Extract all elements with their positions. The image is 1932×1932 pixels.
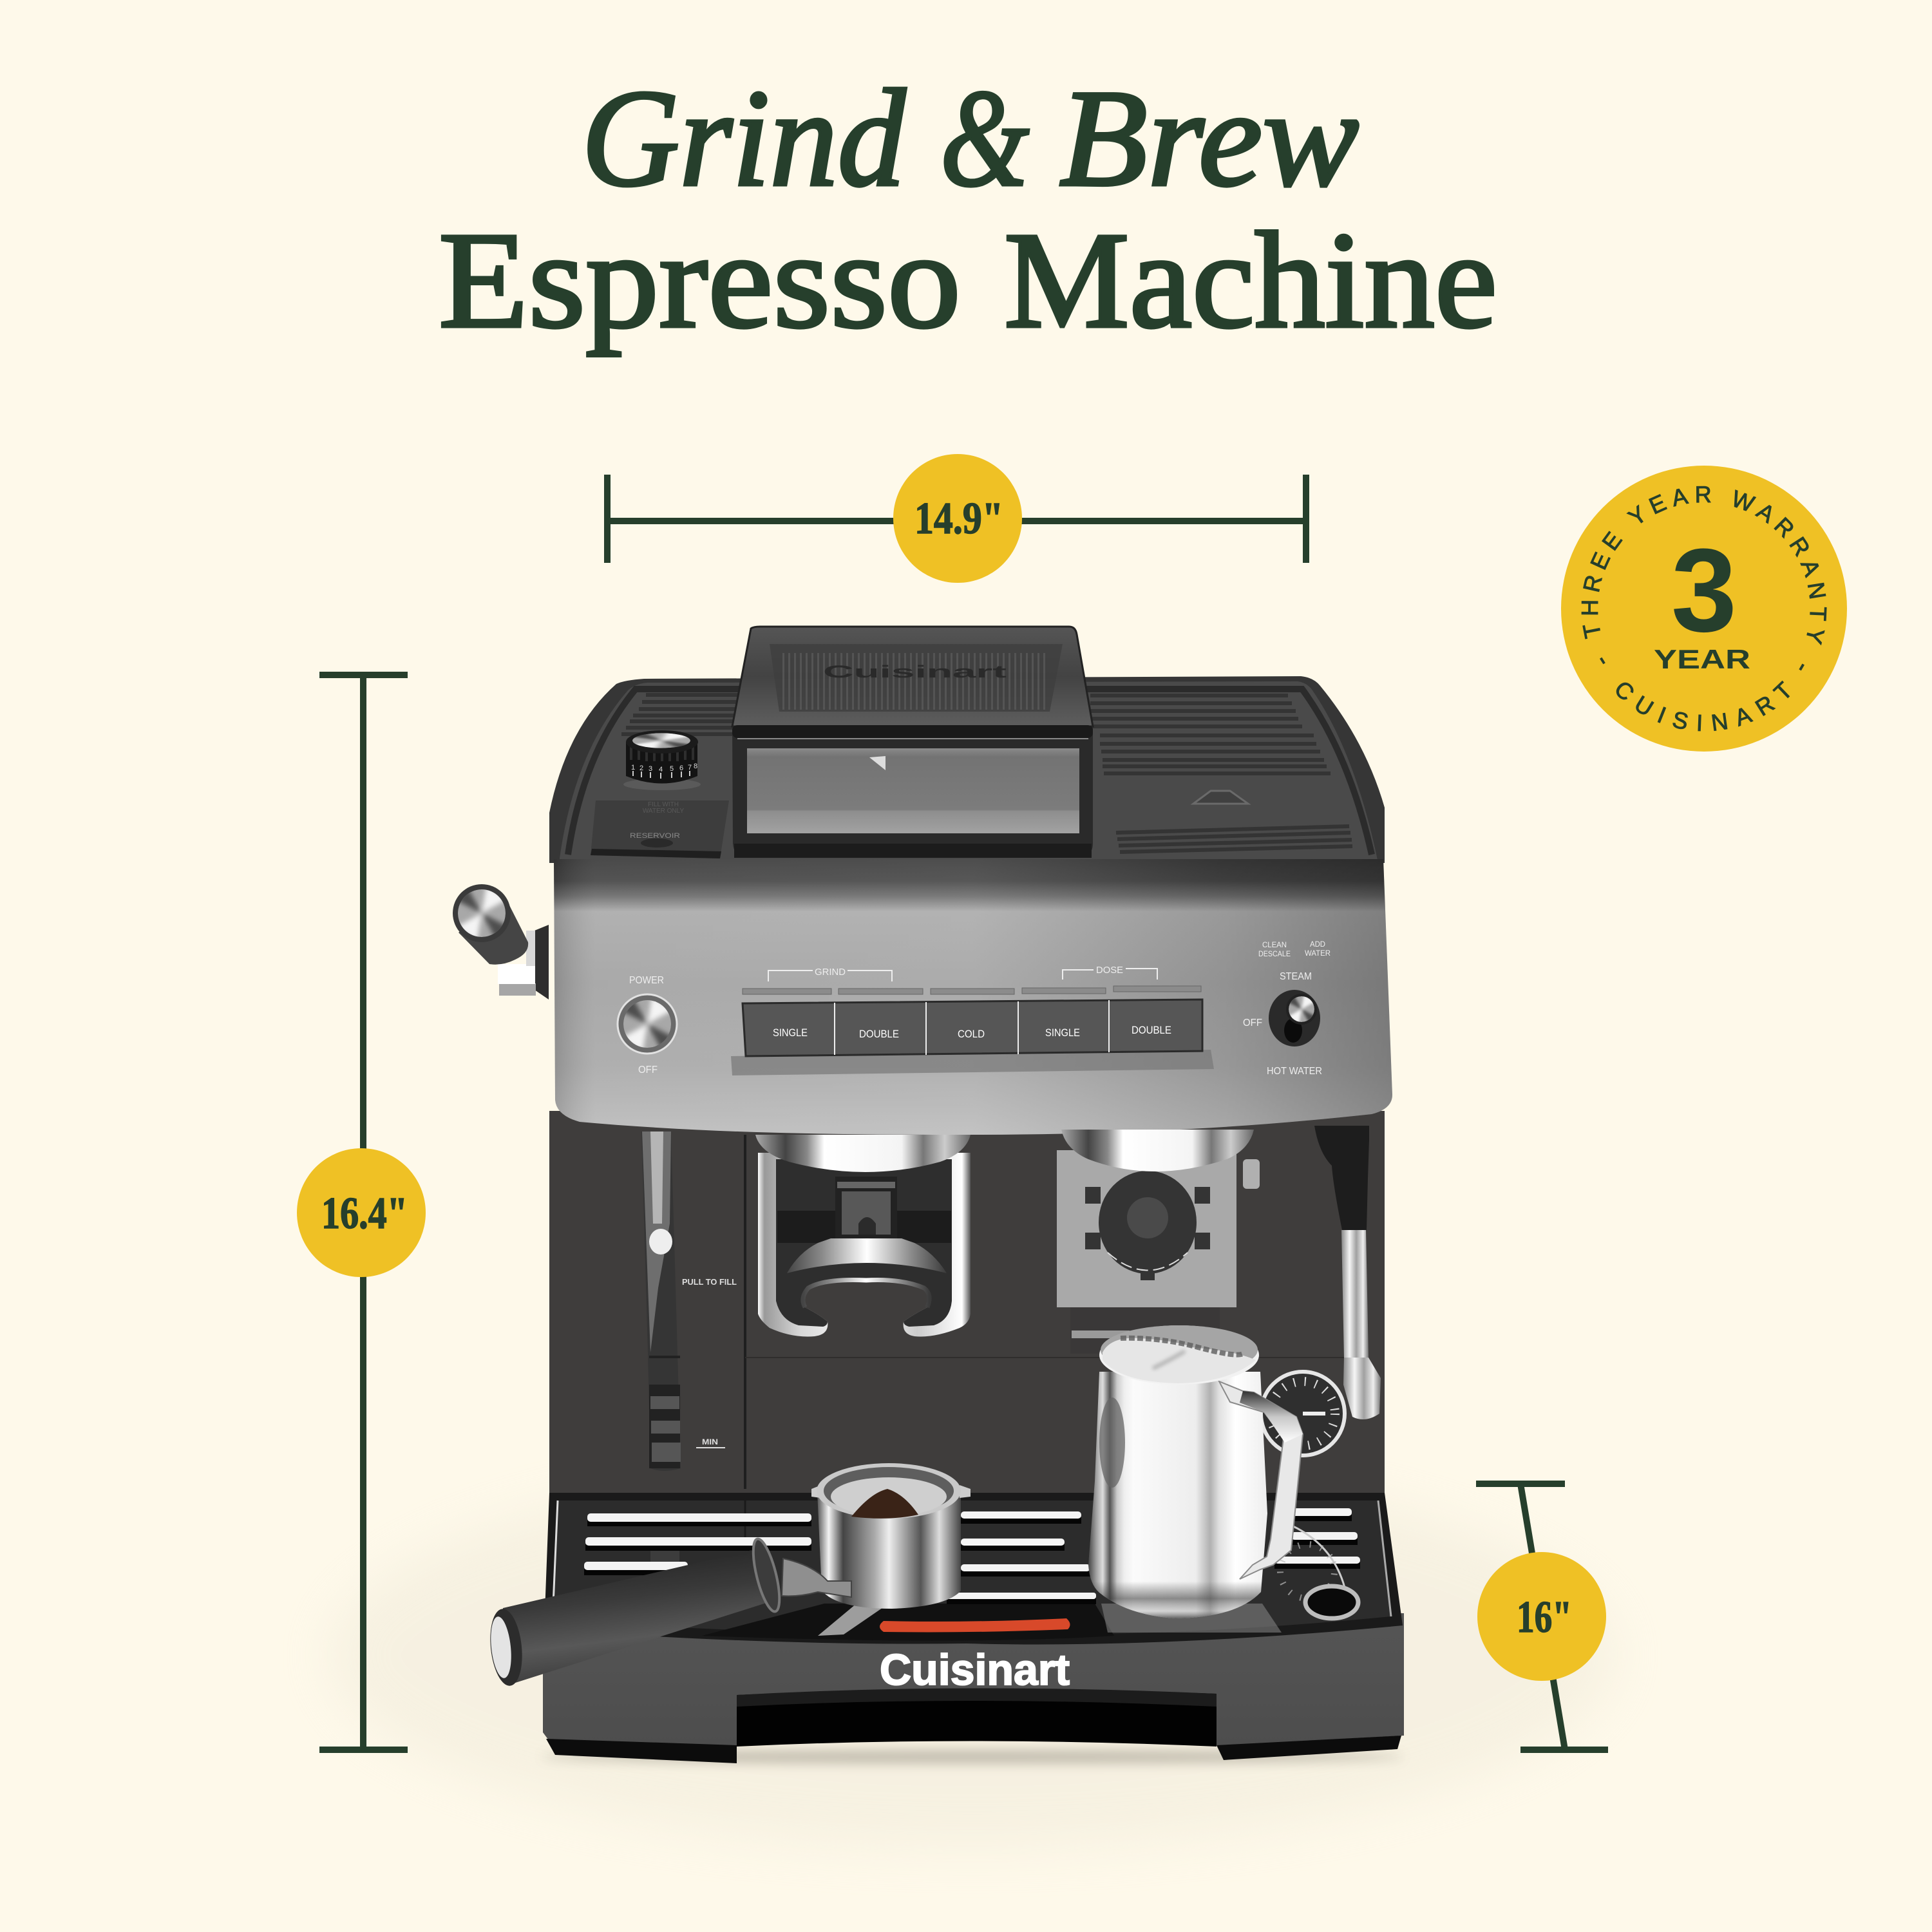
grind dial: 5 xyxy=(670,765,674,773)
side knob xyxy=(453,884,549,999)
status labels: WATER xyxy=(1305,949,1331,958)
depth dimension: 16" xyxy=(1517,1593,1572,1642)
water level window xyxy=(641,1132,737,1471)
grind dial: 2 xyxy=(639,764,643,772)
drip tray rails xyxy=(584,1508,1360,1604)
pitcher rim and foam xyxy=(1099,1325,1259,1385)
status labels: DESCALE xyxy=(1258,949,1291,958)
grind bracket xyxy=(768,969,1157,981)
chrome ring xyxy=(787,1238,947,1273)
tray body xyxy=(543,1493,1404,1763)
coffee grounds xyxy=(851,1489,918,1519)
pitcher handle xyxy=(1219,1381,1303,1579)
title line one xyxy=(582,61,1359,215)
grind dial: 3 xyxy=(649,765,652,773)
top plate xyxy=(549,676,1385,863)
portafilter handle xyxy=(501,1550,770,1684)
badge year label: YEAR xyxy=(1654,644,1750,674)
title xyxy=(439,61,1497,357)
badge curved text top: THREE YEAR WARRANTY xyxy=(1582,486,1827,645)
lower body xyxy=(549,1111,1385,1501)
button panel recess xyxy=(731,1050,1214,1075)
water level window: PULL TO FILL xyxy=(682,1277,737,1287)
button labels: SINGLE xyxy=(773,1027,808,1039)
grind dial: 1 xyxy=(631,764,635,772)
title line one: & xyxy=(940,61,1029,215)
steel control panel xyxy=(554,859,1392,1135)
grind dial: 6 xyxy=(679,764,683,772)
espresso machine xyxy=(453,627,1404,1763)
title line two xyxy=(439,204,1497,357)
floor shadow xyxy=(328,1462,1616,1848)
width dimension: 14.9" xyxy=(914,494,1003,544)
triangle emblem xyxy=(1193,791,1248,804)
warranty badge xyxy=(1561,466,1847,752)
button labels xyxy=(773,1024,1171,1040)
gauge reflection and drain xyxy=(1273,1526,1358,1618)
grind label: GRIND xyxy=(815,967,846,978)
status labels: ADD xyxy=(1310,940,1325,949)
title line two: Machine xyxy=(1004,204,1497,357)
bean hopper: Cuisinart xyxy=(823,662,1007,681)
milk pitcher xyxy=(1088,1325,1303,1618)
grind dial: 7 xyxy=(688,764,692,772)
bean hopper xyxy=(732,627,1093,858)
title line two: Espresso xyxy=(439,204,961,357)
reservoir lid: FILL WITH xyxy=(648,801,679,808)
grinder chute xyxy=(835,1177,897,1238)
button labels: DOUBLE xyxy=(1132,1024,1171,1036)
buttons xyxy=(743,999,1202,1056)
control labels xyxy=(618,940,1331,1077)
status labels xyxy=(1258,940,1331,958)
height dimension: 16.4" xyxy=(321,1189,408,1238)
button labels: SINGLE xyxy=(1045,1027,1080,1039)
badge right dash: - xyxy=(1787,656,1814,677)
steam label: STEAM xyxy=(1280,971,1312,982)
grind dial: 8 xyxy=(694,762,697,770)
badge curved text bottom: CUISINART xyxy=(1616,680,1790,732)
indicator strips xyxy=(743,986,1201,994)
title line one: Grind xyxy=(582,61,906,215)
water level window: MIN xyxy=(702,1437,718,1446)
power label: POWER xyxy=(629,975,664,986)
left group head and cradle xyxy=(755,1135,971,1336)
reservoir lid: RESERVOIR xyxy=(630,832,680,840)
portafilter lock xyxy=(1085,1171,1210,1280)
grind dial xyxy=(623,730,701,790)
power button xyxy=(618,994,677,1054)
depth dimension xyxy=(1476,1484,1608,1750)
title line one: Brew xyxy=(1059,61,1359,215)
red indicator xyxy=(880,1618,1070,1632)
pitcher body xyxy=(1088,1372,1267,1618)
brand logo: Cuisinart xyxy=(880,1645,1070,1694)
portafilter xyxy=(487,1463,971,1687)
hot water label: HOT WATER xyxy=(1267,1066,1322,1077)
cradle frame xyxy=(758,1153,971,1336)
steam wand xyxy=(1314,1126,1381,1419)
power off label: OFF xyxy=(638,1065,658,1075)
steam selector xyxy=(1269,990,1320,1046)
dose label: DOSE xyxy=(1096,965,1123,976)
badge number: 3 xyxy=(1671,524,1737,656)
reservoir lid xyxy=(591,800,729,858)
badge left dash: - xyxy=(1590,650,1617,670)
button labels: COLD xyxy=(958,1028,985,1040)
pressure gauge xyxy=(1261,1372,1345,1455)
status labels: CLEAN xyxy=(1262,940,1287,949)
portafilter basket xyxy=(817,1492,961,1609)
grind dial: 4 xyxy=(659,766,663,773)
height dimension xyxy=(297,675,426,1750)
left group head xyxy=(755,1135,971,1172)
cradle interior xyxy=(776,1159,952,1327)
button labels: DOUBLE xyxy=(859,1028,899,1040)
right group head and silver plate xyxy=(1057,1130,1260,1354)
off label: OFF xyxy=(1243,1018,1262,1028)
reservoir lid: WATER ONLY xyxy=(643,808,684,815)
width dimension xyxy=(607,454,1306,583)
